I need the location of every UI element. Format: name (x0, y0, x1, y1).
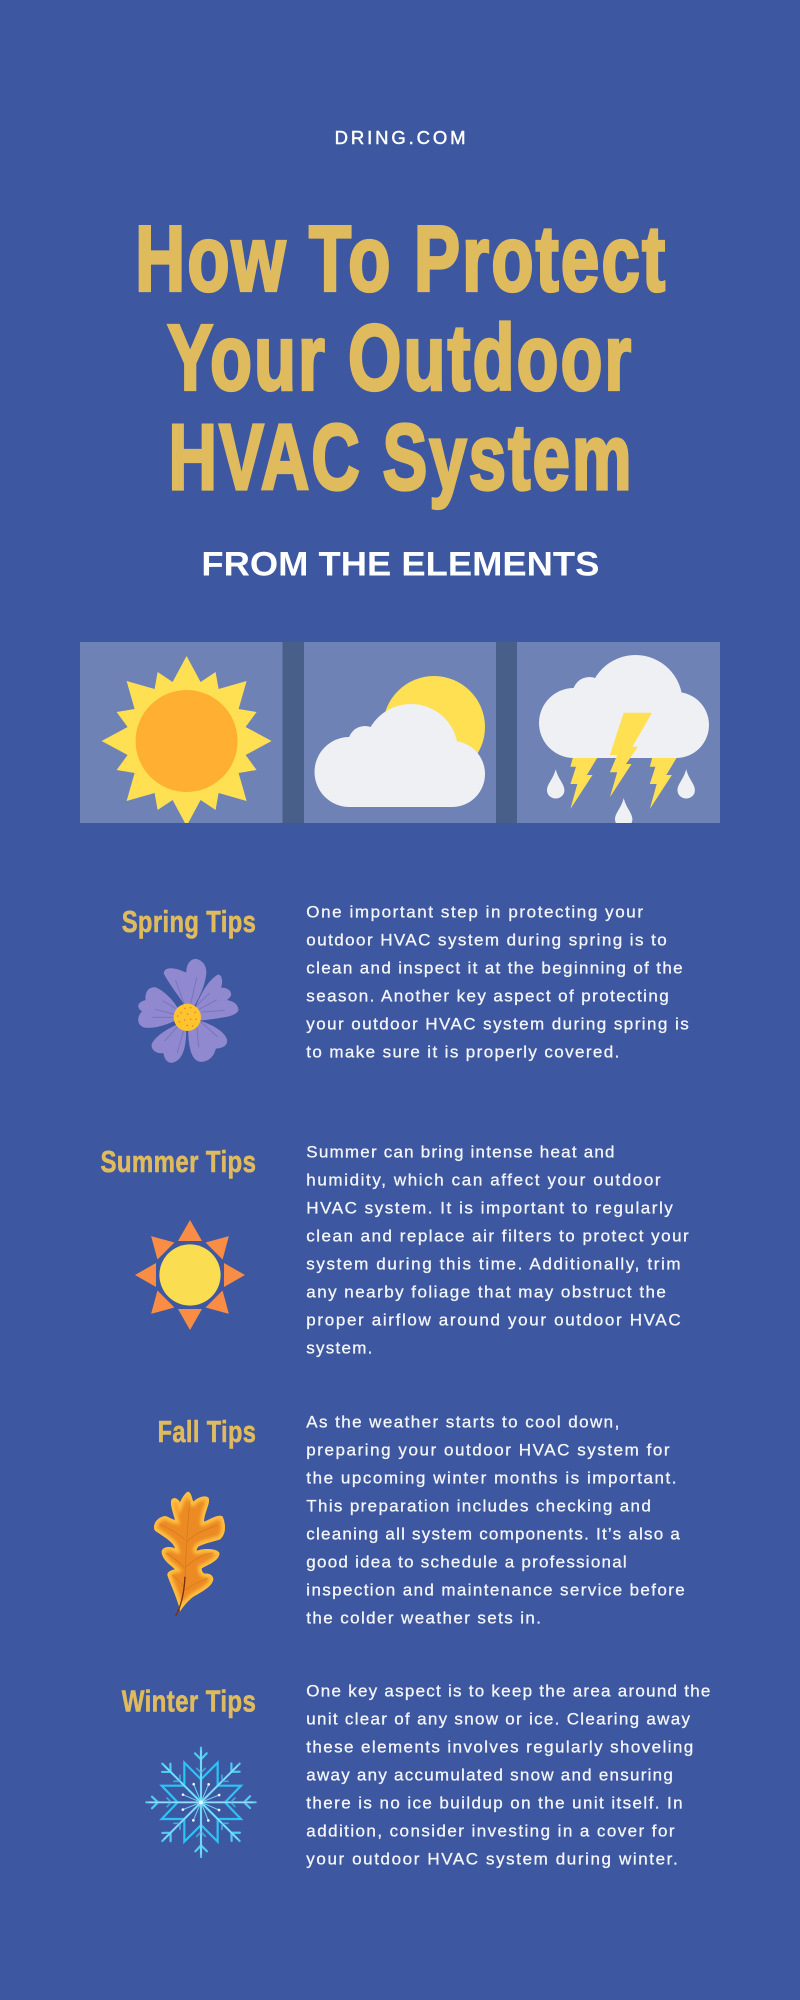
body text: fall: the upcoming winter months is important. (306, 1468, 676, 1487)
heading: fall tips: Fall Tips (158, 1414, 256, 1449)
body text: fall (306, 1412, 685, 1627)
icon: centre lightning bolt (610, 713, 652, 797)
title: HVAC System (169, 405, 634, 509)
body text: spring: outdoor HVAC system during spring is to (306, 930, 667, 949)
icon: storm cloud (539, 655, 709, 758)
panel: fall tips (154, 1412, 685, 1627)
body text: summer: any nearby foliage that may obstruct the (306, 1282, 666, 1301)
body text: summer: clean and replace air filters to protect your (306, 1226, 689, 1245)
icon: autumn leaf (154, 1492, 225, 1616)
body text: fall: As the weather starts to cool down, (306, 1412, 619, 1431)
body text: spring: clean and inspect it at the beginning of the (306, 958, 683, 977)
body text: summer: Summer can bring intense heat and (306, 1142, 614, 1161)
body text: winter: away any accumulated snow and ensuring (306, 1765, 673, 1784)
panel: winter tips (122, 1681, 710, 1868)
body text: spring: your outdoor HVAC system during spring is (306, 1014, 689, 1033)
panel: spring tips (122, 902, 689, 1062)
body text: fall: This preparation includes checking and (306, 1496, 651, 1515)
band separators (282, 642, 517, 823)
body text: winter: One key aspect is to keep the area around the (306, 1681, 710, 1700)
body text: summer: HVAC system. It is important to regularly (306, 1198, 673, 1217)
icon: rain drops (547, 769, 695, 828)
heading: winter tips: Winter Tips (122, 1683, 256, 1718)
title: Your Outdoor (167, 305, 633, 409)
icon: snowflake (146, 1748, 256, 1857)
icon: small sun (135, 1220, 245, 1330)
title (135, 207, 667, 509)
body text: summer: humidity, which can affect your outdoor (306, 1170, 661, 1189)
body text: summer: proper airflow around your outdoor HVAC (306, 1310, 681, 1329)
body text: winter: addition, consider investing in a cover for (306, 1821, 675, 1840)
body text: fall: cleaning all system components. It’s also a (306, 1524, 680, 1543)
weather tile band (80, 642, 720, 828)
panel: storm tile (517, 642, 720, 828)
body text: fall: the colder weather sets in. (306, 1608, 541, 1627)
panel: summer tips (100, 1142, 689, 1357)
icon: large sun (102, 656, 272, 826)
body text: winter: these elements involves regularly shoveling (306, 1737, 693, 1756)
body text: summer: system. (306, 1338, 372, 1357)
body text: fall: preparing your outdoor HVAC system for (306, 1440, 670, 1459)
body text: winter: your outdoor HVAC system during winter. (306, 1849, 678, 1868)
icon: side lightning bolts (570, 757, 677, 809)
icon: purple flower (139, 960, 237, 1062)
panel: sunny tile (80, 642, 282, 826)
body text: spring (306, 902, 689, 1061)
body text: fall: good idea to schedule a professional (306, 1552, 627, 1571)
body text: summer (306, 1142, 689, 1357)
body text: winter (306, 1681, 710, 1868)
body text: summer: system during this time. Additionally, trim (306, 1254, 681, 1273)
body text: spring: One important step in protecting your (306, 902, 643, 921)
site name: DRING.COM: DRING.COM (335, 127, 466, 148)
body text: spring: season. Another key aspect of protecting (306, 986, 669, 1005)
icon: cloud (314, 704, 485, 807)
icon: sun behind cloud (383, 676, 485, 778)
heading: summer tips: Summer Tips (100, 1144, 256, 1179)
subtitle: FROM THE ELEMENTS (201, 546, 599, 584)
body text: winter: unit clear of any snow or ice. Clearing away (306, 1709, 690, 1728)
heading: spring tips: Spring Tips (122, 904, 256, 939)
body text: fall: inspection and maintenance service before (306, 1580, 685, 1599)
body text: spring: to make sure it is properly covered. (306, 1042, 619, 1061)
body text: winter: there is no ice buildup on the unit itself. In (306, 1793, 683, 1812)
panel: partly cloudy tile (304, 642, 496, 823)
